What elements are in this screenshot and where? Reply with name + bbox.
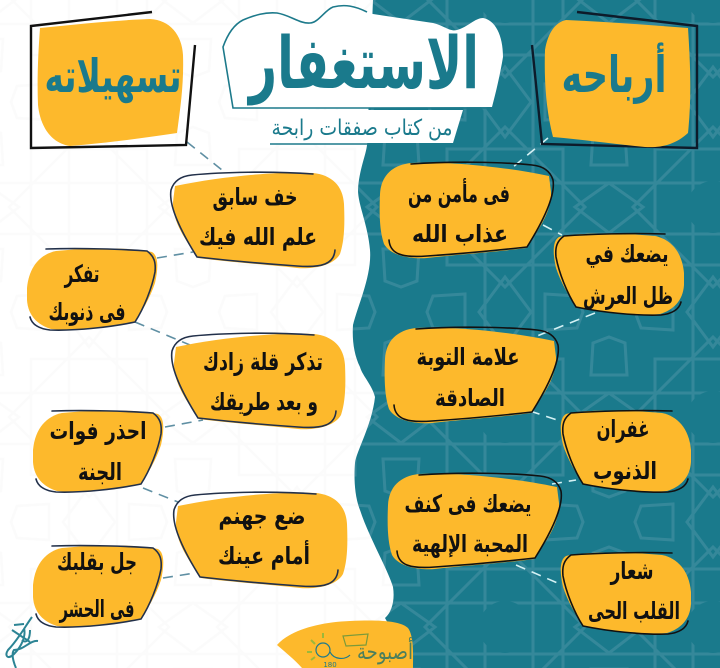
subtitle underline [270, 143, 367, 145]
panel: right header [532, 12, 697, 148]
bubble: right 6 [561, 552, 691, 634]
logo text: أصبوحة [357, 637, 413, 665]
bubble: left 6: فى الحشر [59, 595, 134, 623]
signature [6, 617, 38, 668]
bubble: right 2: يضعك في [586, 240, 668, 268]
bubble: right 1: عذاب الله [412, 220, 508, 248]
bubble: left 3: و بعد طريقك [210, 388, 318, 416]
logo background [277, 621, 413, 668]
title banner [223, 6, 503, 144]
logo badge [277, 621, 413, 668]
icon: sun [307, 633, 350, 660]
bubble: right 2 [554, 234, 684, 315]
subtitle strip [263, 110, 463, 143]
bubble: right 1: فى مأمن من [408, 178, 510, 208]
bubble: left 2: فى ذنوبك [48, 298, 126, 326]
bubble: left 4 [33, 410, 163, 492]
subtitle text: من كتاب صفقات رابحة [272, 116, 452, 141]
connectors: right column [513, 138, 595, 585]
heading: أرباحه [562, 42, 666, 104]
bubble: left 2 [27, 248, 157, 330]
bubble: left 4: الجنة [78, 458, 122, 486]
bubble: right 4: غفران [596, 415, 650, 443]
bubble: left 6 [33, 546, 163, 627]
bubble: right 4: الذنوب [593, 457, 657, 485]
title text: الاستغفار [247, 21, 479, 106]
bubble: right 1 [380, 162, 553, 258]
bubble: right 3: الصادقة [435, 384, 505, 412]
bubble: left 1: خف سابق [212, 183, 298, 211]
frame [31, 12, 195, 148]
yellow block [545, 20, 690, 147]
bubble: right 5: المحبة الإلهية [412, 530, 528, 558]
icon: crown [343, 634, 368, 646]
bubble: left 5: ضع جهنم [218, 502, 306, 530]
bubble: left 3: تذكر قلة زادك [203, 348, 323, 376]
yellow block [38, 19, 183, 146]
bubble: left 5 [174, 492, 347, 588]
connectors: left column [135, 142, 222, 578]
bubble: left 3 [172, 333, 345, 429]
bubble: left 5: أمام عينك [218, 540, 310, 570]
heading: تسهيلاته [44, 49, 182, 103]
panel: left header [31, 12, 195, 148]
bubble: right 4 [561, 410, 691, 492]
bubble: left 1: علم الله فيك [199, 223, 317, 251]
bubble: left 6: جل بقلبك [57, 548, 137, 576]
bubble: right 3: علامة التوبة [416, 343, 520, 371]
frame [532, 12, 697, 148]
bubble: left 2: تفكر [64, 260, 100, 288]
bubble: right 3 [385, 327, 558, 423]
title outline [223, 6, 492, 108]
bubble: left 1 [171, 172, 344, 268]
bubble: right 2: ظل العرش [583, 282, 673, 310]
title white shape [223, 6, 503, 108]
bubble: left 4: احذر فوات [50, 417, 146, 445]
teal patterned background [353, 0, 720, 668]
bubble: right 5: يضعك فى كنف [404, 490, 532, 518]
bubble: right 5 [388, 473, 561, 569]
bubble: right 6: شعار [610, 557, 654, 585]
